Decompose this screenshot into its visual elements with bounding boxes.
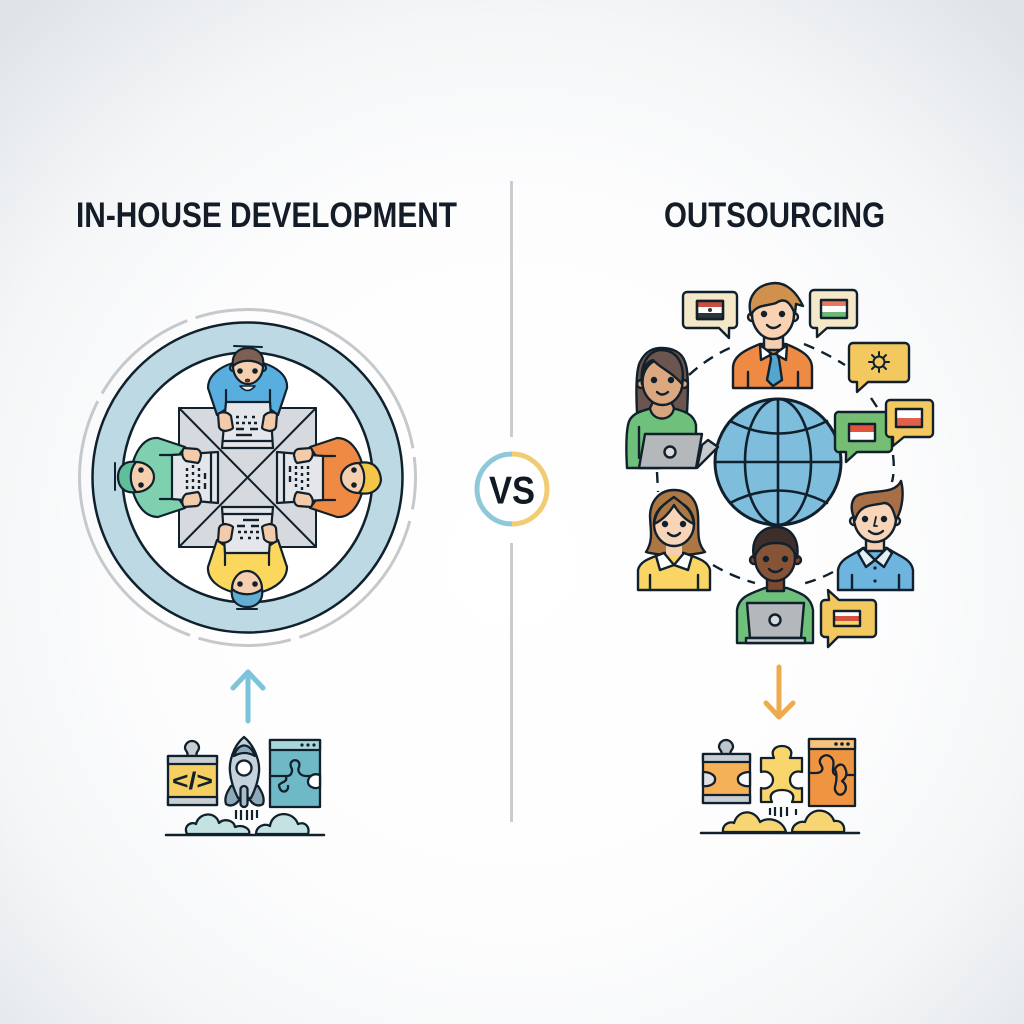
person right: orange — [277, 438, 381, 517]
icon: thrust lines — [236, 810, 257, 820]
blue ring — [108, 338, 388, 618]
icon: clouds — [723, 811, 844, 832]
speech bubble: flag top right — [810, 290, 857, 337]
person: woman with laptop, top left — [626, 348, 718, 468]
person left: green — [115, 438, 218, 517]
in-house product icons — [166, 737, 324, 835]
person: man with laptop, bottom — [737, 527, 813, 643]
title: in-house development: IN-HOUSE DEVELOPMENT — [76, 196, 457, 235]
globe — [715, 399, 841, 525]
icon: orange puzzle browser window — [809, 739, 855, 806]
icon: clouds — [186, 814, 309, 834]
ground line — [166, 834, 324, 836]
person: top man orange — [733, 283, 812, 388]
person: woman yellow, bottom left — [638, 490, 710, 590]
icon: yellow puzzle piece — [761, 746, 802, 802]
speech bubble: flag top left — [683, 292, 737, 338]
title: outsourcing: OUTSOURCING — [664, 196, 885, 235]
icon: code puzzle piece — [168, 741, 217, 805]
ground line — [701, 832, 859, 834]
arrow down: orange — [766, 667, 793, 717]
center divider — [510, 181, 513, 822]
speech bubble: yellow flag — [886, 400, 933, 446]
speech bubble: green flag — [835, 412, 892, 462]
icon: puzzle browser window — [270, 740, 320, 807]
icon: rocket — [225, 737, 264, 807]
icon: thrust lines — [770, 807, 796, 817]
icon: orange puzzle piece — [703, 740, 750, 803]
person top: blue — [208, 346, 287, 448]
outsourcing team illustration — [626, 283, 933, 647]
icon: code puzzle piece: </> — [172, 768, 213, 795]
person: man blue, right — [838, 481, 913, 590]
vs badge — [477, 454, 547, 524]
speech bubble: bottom flag — [821, 590, 876, 647]
segmented outer gray ring — [60, 290, 435, 665]
arrow up: blue — [233, 672, 263, 721]
square table — [179, 408, 316, 547]
dashed network circle — [657, 344, 894, 584]
person bottom: yellow — [208, 507, 287, 609]
in-house team illustration — [60, 290, 435, 665]
speech bubble: sun — [849, 343, 909, 392]
ring outlines — [92, 322, 402, 632]
vs badge: VS — [489, 470, 535, 512]
outsourcing product icons — [701, 739, 859, 833]
